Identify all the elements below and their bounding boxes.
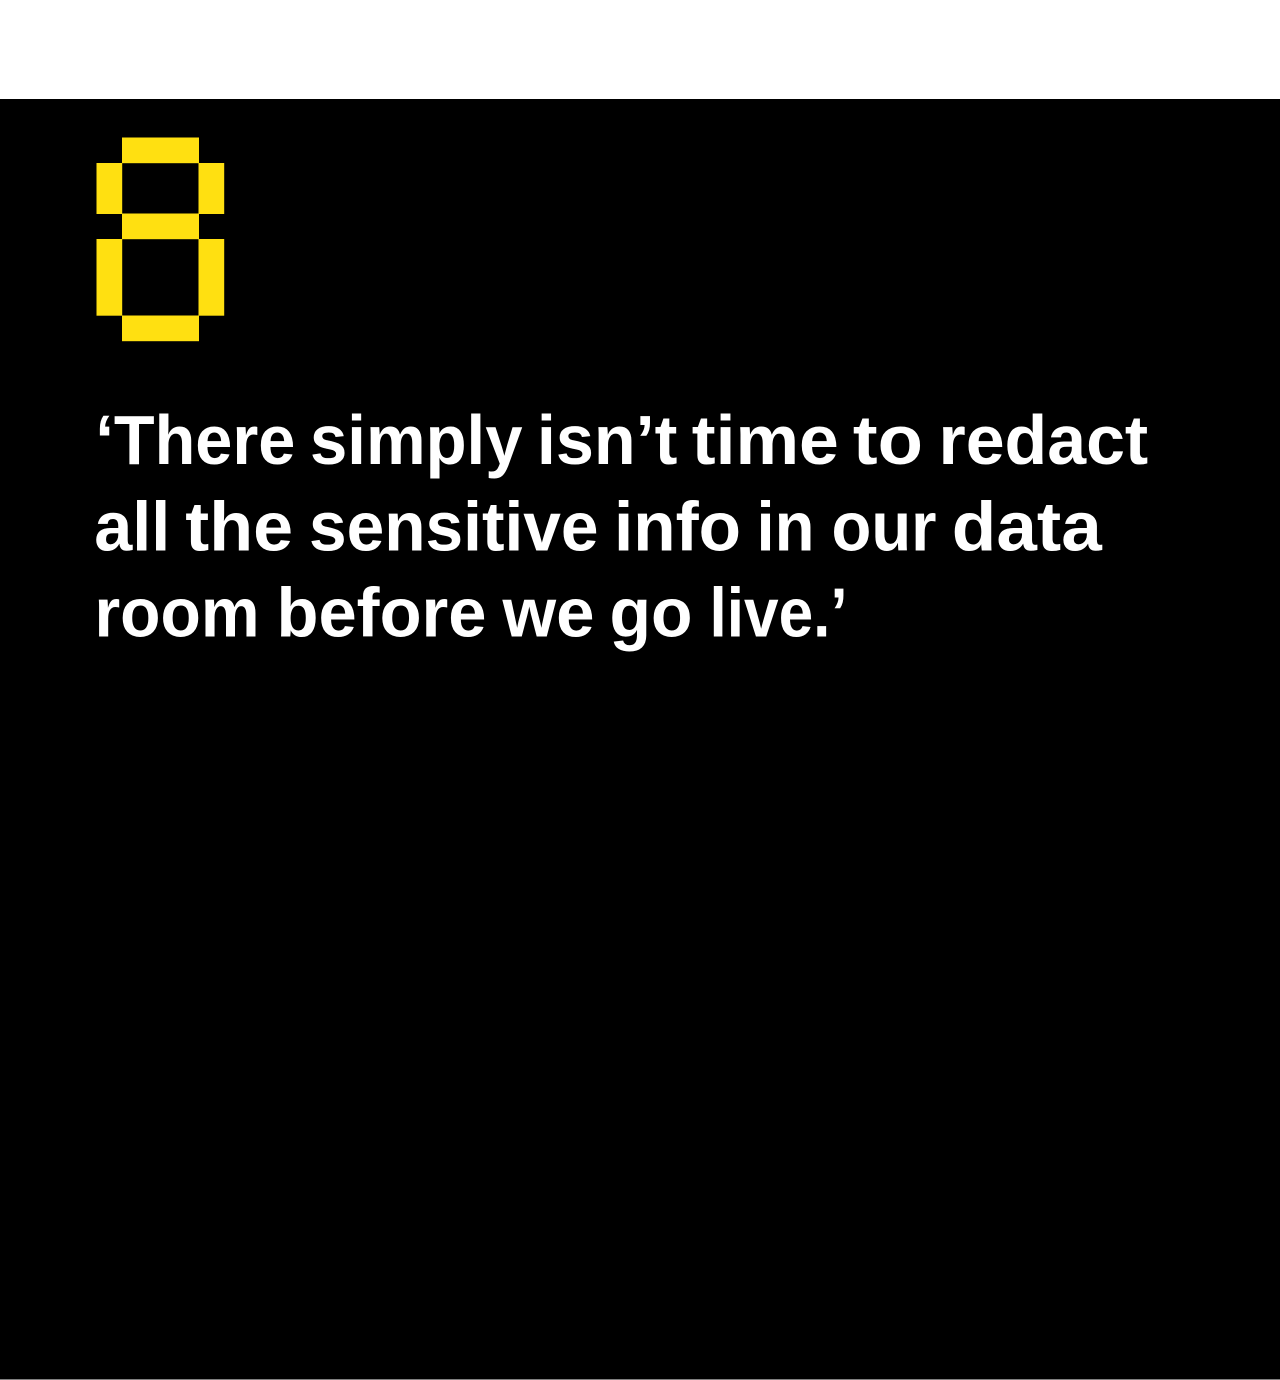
quote line 2: sensitive	[309, 488, 598, 566]
quote line 3: room	[94, 574, 260, 652]
quote line 1: simply	[310, 401, 523, 479]
quote line 2: info	[614, 488, 741, 566]
quote line 2: in	[756, 488, 814, 566]
quote line 2: the	[185, 488, 293, 566]
quote line 1: to	[853, 401, 923, 479]
quote line 2	[94, 488, 1103, 566]
quote line 2: all	[94, 488, 170, 566]
quote text	[94, 401, 1148, 652]
quote line 1: isn’t	[537, 401, 677, 479]
quote line 1: ‘There	[95, 401, 295, 479]
quote line 3: live.’	[710, 574, 848, 652]
quote line 3	[94, 574, 848, 652]
quote line 2: our	[832, 488, 936, 566]
quote line 3: go	[610, 574, 692, 652]
quote line 1: time	[692, 401, 839, 479]
quote line 3: we	[502, 574, 594, 652]
icon: yellow seven-segment digit 8	[96, 138, 224, 341]
quote line 1: redact	[938, 401, 1148, 479]
quote line 3: before	[276, 574, 486, 652]
quote line 2: data	[952, 488, 1103, 566]
quote line 1	[95, 401, 1148, 479]
